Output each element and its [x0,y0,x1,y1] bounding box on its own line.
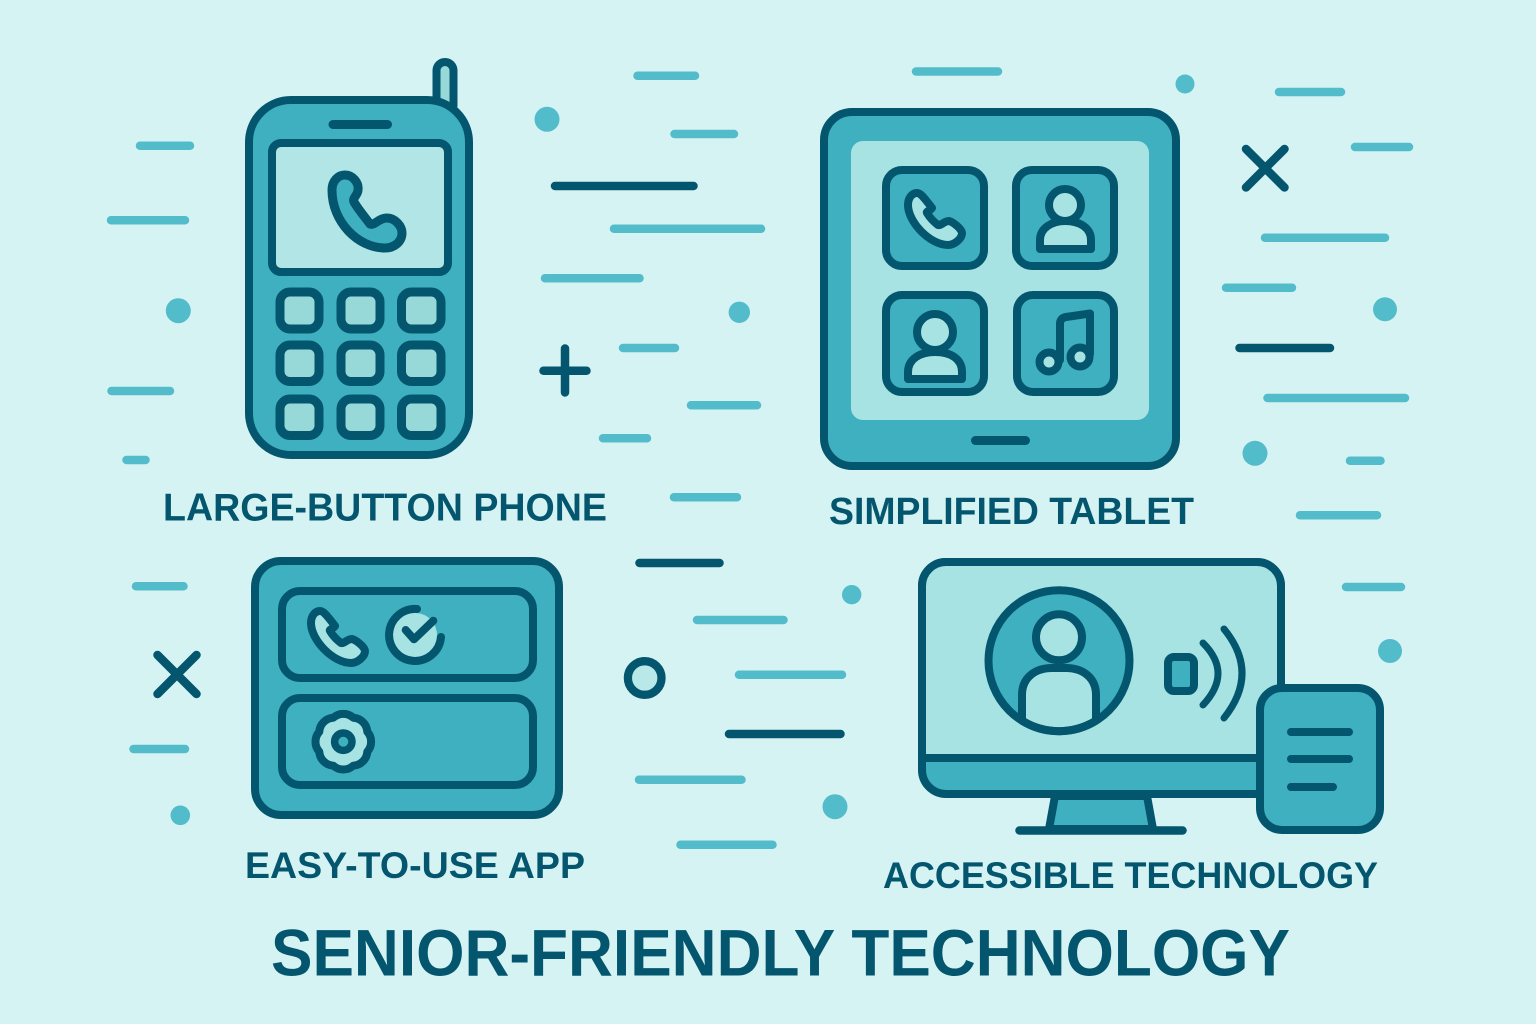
label: easy-to-use app: EASY-TO-USE APP [245,845,585,886]
avatar [988,590,1130,731]
speaker [333,120,388,129]
check badge [389,609,441,661]
tablet body [824,112,1176,466]
icon: accessible technology [922,562,1380,830]
label: simplified tablet: SIMPLIFIED TABLET [829,491,1194,533]
label: accessible technology: ACCESSIBLE TECHNOLOGY [883,855,1378,896]
monitor screen [922,562,1281,758]
antenna [436,62,454,106]
bottom row [282,698,533,785]
title: SENIOR-FRIENDLY TECHNOLOGY [271,916,1290,990]
icon: simplified tablet [824,112,1176,466]
tablet screen [851,141,1149,420]
app tile: profile [886,295,984,392]
monitor base [1020,826,1182,835]
icon: large-button phone [249,62,469,455]
handset icon [311,611,365,663]
document card [1260,688,1380,830]
accent ring [628,661,662,695]
app tile: music [1017,295,1114,392]
background accents: teal dashes and dots [111,72,1409,845]
monitor stand [1049,796,1153,829]
phone screen [272,143,448,272]
app tile: phone [886,170,984,266]
icon: easy-to-use app [255,561,559,815]
app body [255,561,559,815]
keypad [280,292,441,436]
phone body [249,100,469,455]
handset icon [332,175,402,248]
home button [976,436,1026,445]
monitor body [922,562,1281,794]
app tile: contact [1016,170,1114,266]
sound icon [1168,629,1242,718]
dark accents: dashes, plus, crosses [158,149,1330,734]
gear icon [315,714,371,770]
top row [282,591,533,678]
label: large-button phone: LARGE-BUTTON PHONE [163,486,607,530]
